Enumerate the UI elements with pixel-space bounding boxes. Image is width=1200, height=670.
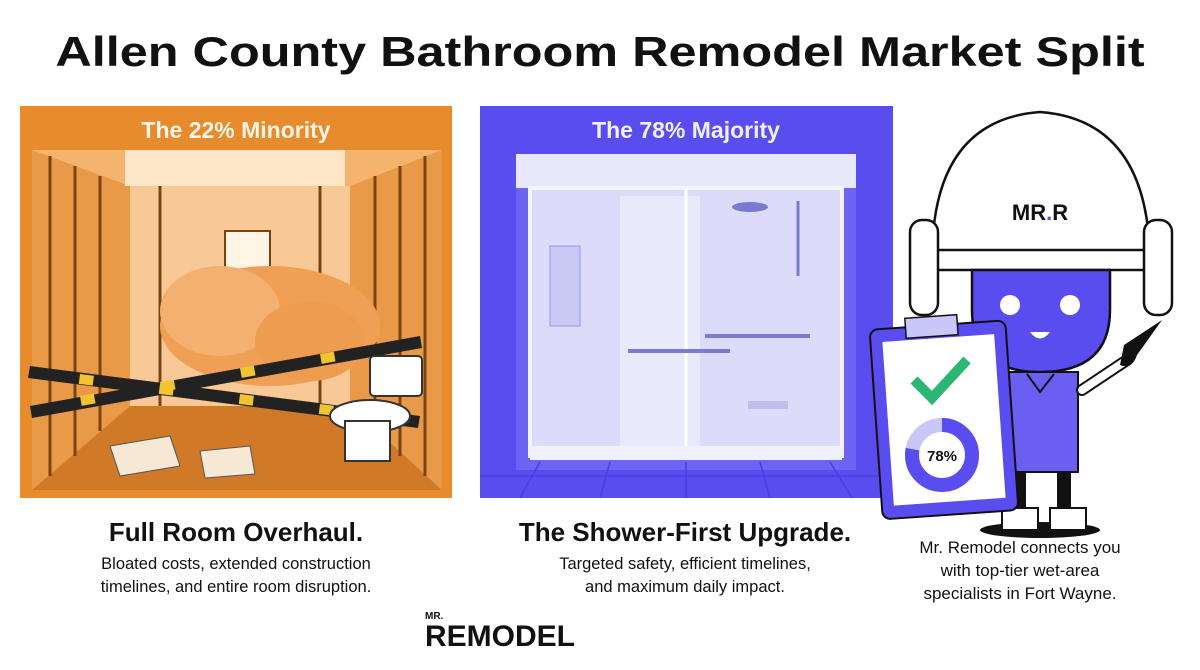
clipboard: 78%	[927, 448, 957, 465]
toilet	[330, 356, 422, 461]
text block: mascot caption: specialists in Fort Wayne.	[923, 584, 1117, 603]
header	[20, 106, 452, 150]
room interior	[28, 150, 442, 490]
text block: shower-first upgrade	[519, 517, 851, 596]
text block: mascot caption: Mr. Remodel connects you	[919, 538, 1121, 557]
helmet: MR.R	[1012, 200, 1068, 225]
text block: mascot caption	[919, 538, 1121, 603]
body	[1002, 372, 1078, 472]
panel: minority full room overhaul: The 22% Minority	[141, 117, 331, 143]
helmet	[910, 112, 1172, 315]
clipboard	[870, 315, 1018, 519]
text block: shower-first upgrade: The Shower-First Upgrade.	[519, 517, 851, 547]
text block: full room overhaul: Full Room Overhaul.	[109, 517, 363, 547]
header: The 78% Majority	[592, 117, 780, 143]
text block: shower-first upgrade: Targeted safety, efficient timelines,	[559, 555, 811, 573]
mascot robot with clipboard	[869, 110, 1174, 538]
text block: mascot caption: with top-tier wet-area	[941, 561, 1099, 580]
text block: full room overhaul: timelines, and entire room disruption.	[101, 578, 371, 596]
face	[972, 270, 1110, 372]
text block: full room overhaul	[101, 517, 371, 596]
logo: MR.	[425, 611, 443, 622]
shower enclosure	[480, 154, 893, 498]
panel: minority full room overhaul	[20, 106, 452, 498]
text block: shower-first upgrade: and maximum daily impact.	[585, 578, 785, 596]
panel: majority shower-first upgrade	[480, 106, 893, 498]
text block: full room overhaul: Bloated costs, extended construction	[101, 555, 371, 573]
logo: REMODEL	[425, 620, 575, 653]
title: Allen County Bathroom Remodel Market Split	[55, 28, 1145, 75]
